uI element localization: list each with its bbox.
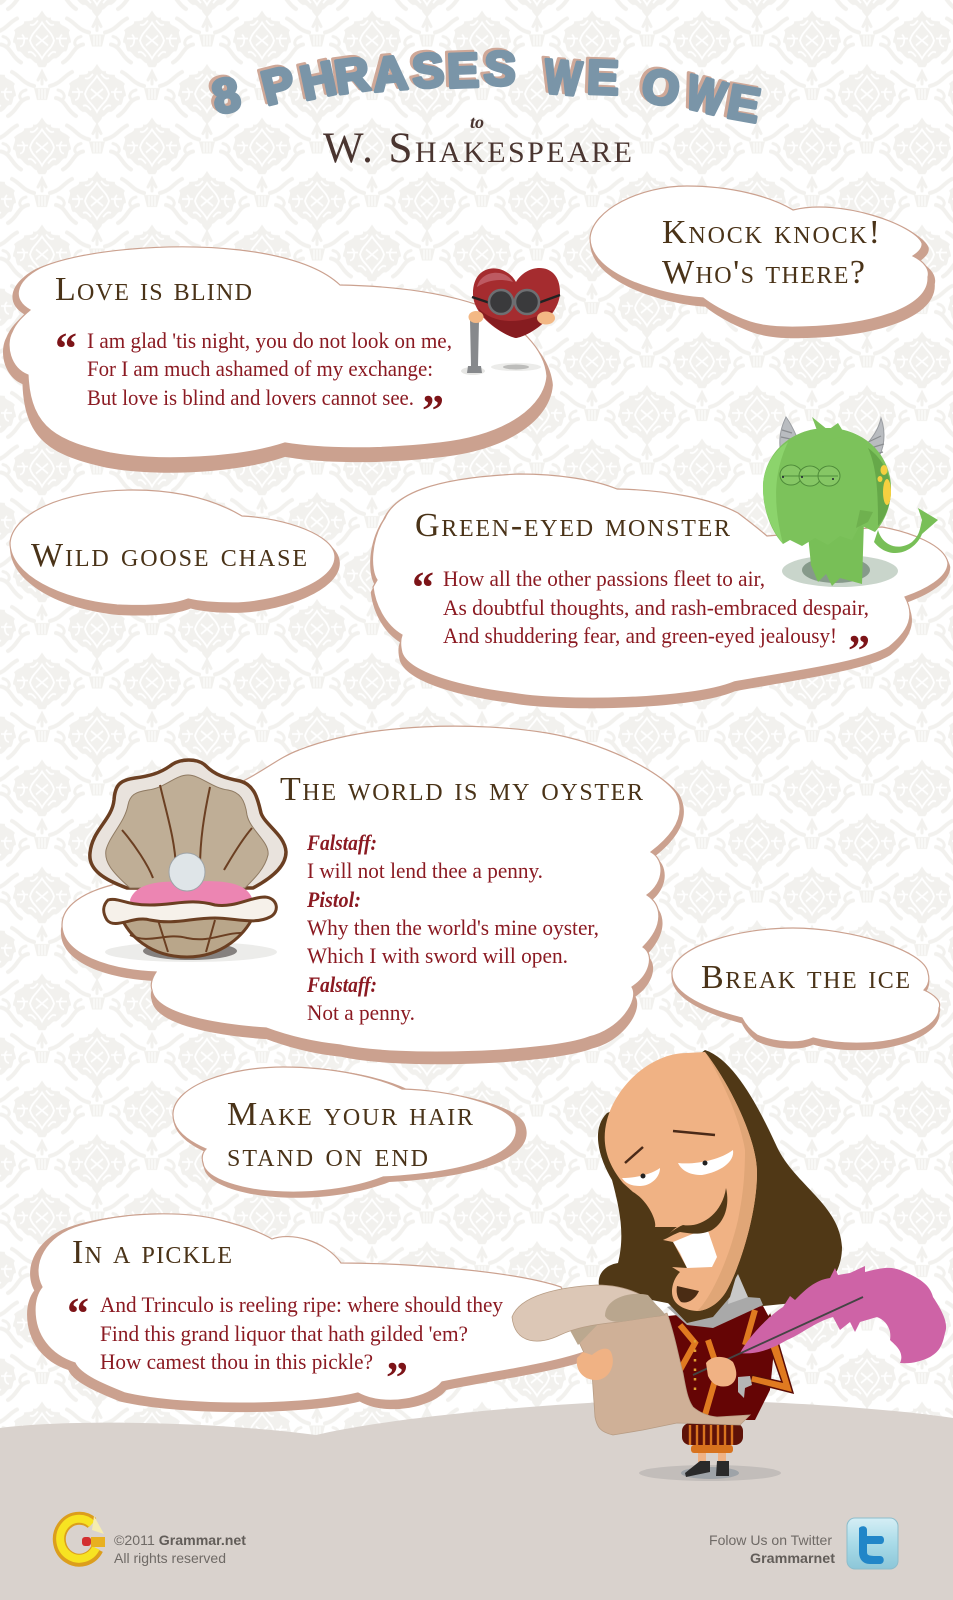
face shading [697, 1052, 757, 1311]
dialogue: Why then the world's mine oyster, [307, 915, 599, 940]
twitter text: Folow Us on Twitter [709, 1532, 832, 1548]
closing quote: ” [422, 386, 444, 435]
heading: make your hair: Make your hair [227, 1096, 473, 1133]
twitter text: Grammarnet [750, 1550, 835, 1566]
title: 8 phrases we owe: 8 [208, 68, 245, 125]
mouth teeth [673, 1228, 717, 1268]
verse: Find this grand liquor that hath gilded 'em? [100, 1321, 468, 1346]
title: 8 phrases we owe: W [542, 50, 584, 106]
dialogue: Falstaff: [306, 830, 377, 855]
title: 8 phrases we owe: R [331, 48, 373, 105]
verse: For I am much ashamed of my exchange: [87, 356, 433, 381]
dialogue: Pistol: [306, 887, 361, 912]
copyright text: ©2011 Grammar.net [114, 1532, 246, 1548]
dialogue: I will not lend thee a penny. [307, 858, 543, 883]
subtitle: to: to [470, 112, 484, 132]
verse: I am glad 'tis night, you do not look on me, [87, 328, 452, 353]
verse [100, 1292, 503, 1374]
heading: in a pickle: In a pickle [72, 1234, 232, 1271]
beard [668, 1270, 738, 1323]
right hand and cuff [706, 1357, 752, 1398]
panel: in a pickle [27, 1214, 599, 1412]
verse: And shuddering fear, and green-eyed jealousy! [443, 623, 837, 648]
verse [443, 566, 869, 648]
neck [728, 1274, 748, 1304]
hair [598, 1050, 842, 1310]
face [605, 1052, 757, 1311]
heading: who's there: Who's there? [662, 254, 865, 291]
title: 8 phrases we owe: S [483, 42, 517, 97]
title: 8 phrases we owe: E [723, 76, 764, 133]
copyright text [114, 1532, 246, 1566]
verse: How all the other passions fleet to air, [443, 566, 765, 591]
title: 8 phrases we owe [208, 42, 764, 133]
sleeve and stripes [680, 1310, 793, 1415]
legs and shoes [685, 1450, 729, 1477]
heading: green-eyed monster: Green-eyed monster [415, 507, 730, 544]
heading: break the ice: Break the ice [701, 959, 910, 996]
verse: And Trinculo is reeling ripe: where should they [100, 1292, 503, 1317]
title: 8 phrases we owe: O [638, 59, 684, 118]
verse [87, 328, 452, 410]
icon: oyster with pearl [90, 760, 286, 962]
dialogue [306, 830, 599, 1025]
panel: green-eyed monster [370, 474, 950, 708]
heading: the world is my oyster: The world is my oyster [280, 771, 643, 808]
opening quote: “ [55, 324, 77, 373]
goatee [677, 1286, 699, 1303]
heading: love is blind: Love is blind [55, 271, 252, 308]
doublet [668, 1306, 776, 1420]
verse: But love is blind and lovers cannot see. [87, 385, 414, 410]
panel: knock knock [590, 186, 935, 338]
breeches [682, 1423, 743, 1453]
left hand [577, 1349, 613, 1380]
subtitle: W. Shakespeare: W. Shakespeare [323, 125, 632, 172]
illustration: Shakespeare [512, 1050, 946, 1481]
title: 8 phrases we owe: E [586, 51, 620, 106]
title: 8 phrases we owe: W [681, 66, 731, 127]
icon: twitter [847, 1518, 898, 1569]
panel: wild goose chase [10, 490, 340, 616]
feather quill [693, 1266, 946, 1375]
ground [0, 1400, 953, 1600]
title: 8 phrases we owe: A [371, 47, 410, 102]
opening quote: “ [67, 1289, 89, 1338]
panel: break the ice [671, 928, 940, 1050]
icon: green monster [763, 417, 938, 587]
heading: wild goose chase: Wild goose chase [31, 537, 307, 574]
copyright text: All rights reserved [114, 1550, 226, 1566]
title: 8 phrases we owe: P [256, 57, 300, 116]
scroll [512, 1285, 750, 1435]
ground shadow [639, 1465, 781, 1481]
opening quote: “ [412, 563, 434, 612]
closing quote: ” [848, 626, 870, 675]
title: 8 phrases we owe: E [446, 44, 480, 99]
icon: blind heart [461, 268, 560, 375]
title: 8 phrases we owe: H [296, 52, 341, 111]
dialogue: Which I with sword will open. [307, 943, 568, 968]
title: 8 phrases we owe: S [410, 44, 446, 99]
heading: stand on end: stand on end [227, 1137, 428, 1174]
dialogue: Falstaff: [306, 972, 377, 997]
ruff collar [667, 1297, 763, 1328]
moustache [663, 1188, 727, 1240]
twitter text [709, 1532, 835, 1566]
panel: make your hair stand on end [173, 1067, 527, 1198]
heading: knock knock: Knock knock! [662, 214, 880, 251]
logo: Grammar.net G [59, 1516, 105, 1560]
eyes [622, 1131, 733, 1186]
dialogue: Not a penny. [307, 1000, 415, 1025]
verse: How camest thou in this pickle? [100, 1349, 373, 1374]
closing quote: ” [386, 1353, 408, 1402]
panel: the world is my oyster [61, 726, 684, 1064]
panel: love is blind [3, 247, 553, 473]
verse: As doubtful thoughts, and rash-embraced despair, [443, 595, 869, 620]
